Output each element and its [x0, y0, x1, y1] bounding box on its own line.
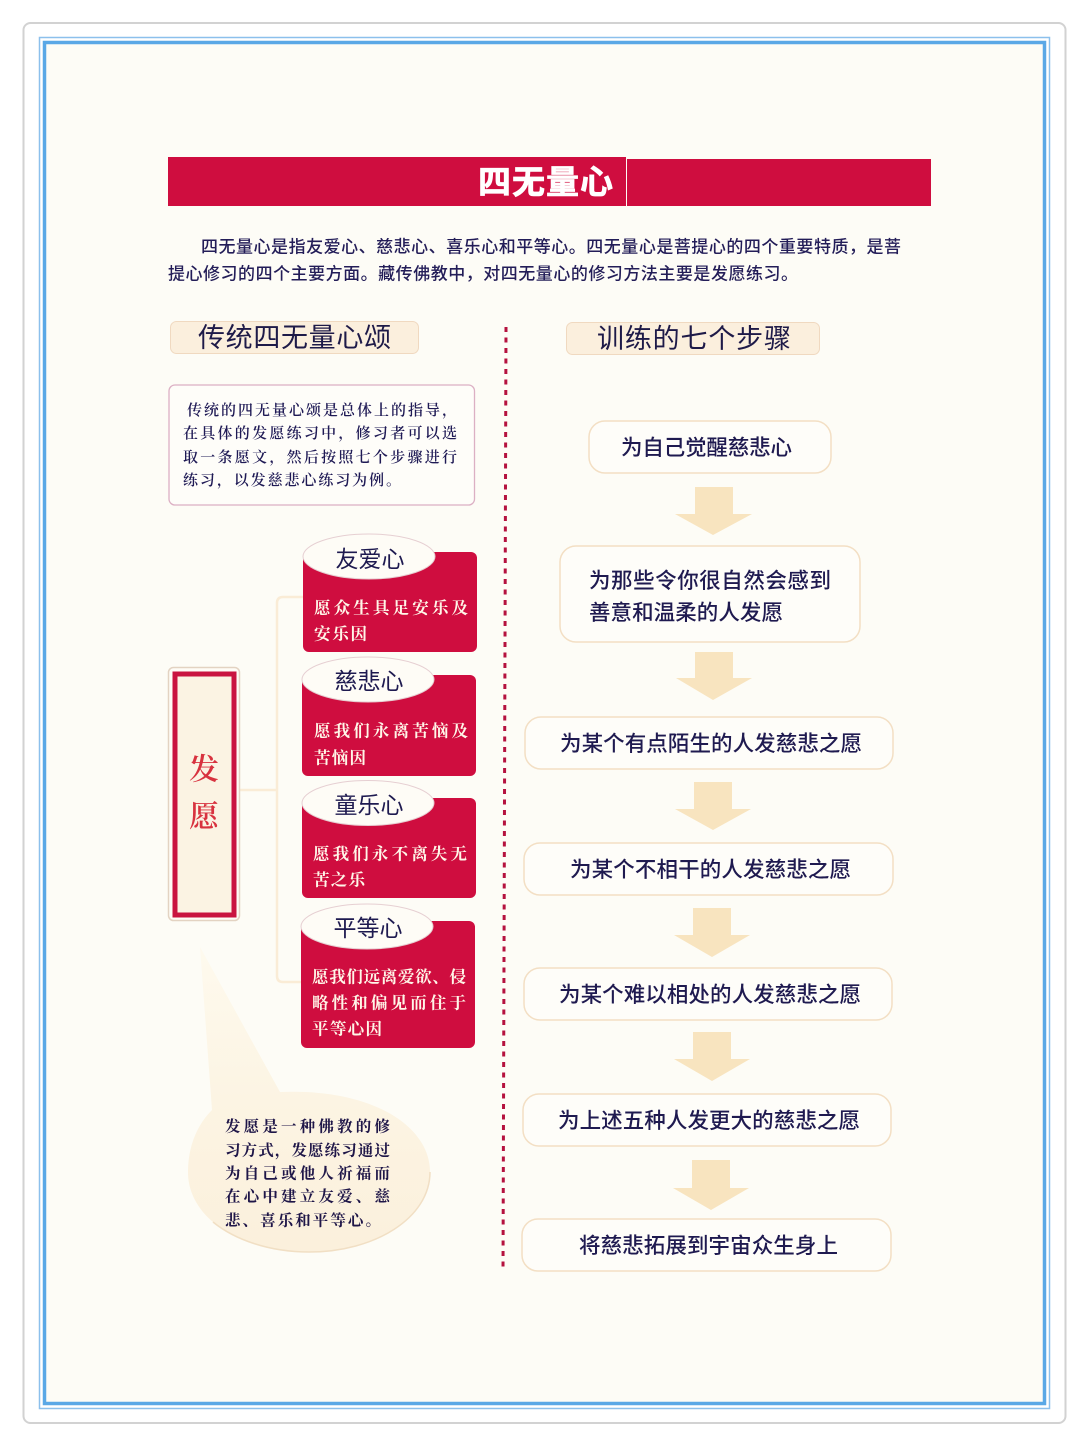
title banner [168, 157, 931, 206]
card: loving kindness: 愿众生具足安乐及 [314, 598, 468, 618]
card: loving kindness: 安乐因 [314, 624, 367, 644]
arrow 2 [676, 652, 752, 700]
intro paragraph [168, 238, 901, 284]
step 4: 为某个不相干的人发慈悲之愿 [570, 858, 851, 882]
card: equanimity [301, 904, 475, 1048]
step 1: 为自己觉醒慈悲心 [621, 436, 792, 460]
step 4 [524, 843, 893, 895]
card: equanimity: 略性和偏见而住于 [312, 992, 466, 1012]
note box: 在具体的发愿练习中，修习者可以选 [183, 424, 457, 442]
card: joy: 愿我们永不离失无 [313, 844, 467, 864]
speech bubble: 悲、喜乐和平等心。 [225, 1210, 381, 1230]
card: joy: 童乐心 [334, 792, 404, 818]
intro paragraph: 提心修习的四个主要方面。藏传佛教中，对四无量心的修习方法主要是发愿练习。 [168, 264, 798, 284]
arrow 1 [675, 487, 752, 535]
note box: 传统的四无量心颂是总体上的指导， [187, 401, 457, 419]
arrow 5 [674, 1032, 750, 1081]
card: loving kindness: 友爱心 [336, 546, 404, 572]
connector lines [240, 597, 303, 982]
speech bubble [188, 947, 430, 1252]
card: compassion [302, 657, 476, 776]
card: equanimity: 平等心 [334, 915, 402, 941]
step 7 [522, 1219, 891, 1271]
arrow 4 [674, 908, 750, 957]
card: joy: 苦之乐 [313, 870, 366, 890]
step 3 [525, 717, 893, 769]
card: equanimity: 平等心因 [312, 1018, 382, 1038]
center dotted divider [503, 327, 506, 1272]
heading: traditional verse: 传统四无量心颂 [198, 323, 391, 353]
step 6: 为上述五种人发更大的慈悲之愿 [558, 1109, 860, 1133]
card: compassion: 苦恼因 [314, 748, 366, 768]
intro paragraph: 四无量心是指友爱心、慈悲心、喜乐心和平等心。四无量心是菩提心的四个重要特质，是菩 [201, 238, 901, 256]
title: 四无量心 [478, 164, 613, 200]
speech bubble: 为自己或他人祈福而 [225, 1164, 390, 1182]
card: compassion: 愿我们永离苦恼及 [314, 720, 468, 740]
speech bubble: 习方式，发愿练习通过 [225, 1140, 390, 1160]
card: compassion: 慈悲心 [334, 668, 404, 694]
arrow 3 [675, 782, 751, 830]
note box: 取一条愿文，然后按照七个步骤进行 [183, 448, 457, 466]
heading: seven steps: 训练的七个步骤 [597, 324, 791, 354]
card: equanimity: 愿我们远离爱欲、侵 [312, 966, 466, 986]
step 5 [524, 968, 892, 1020]
speech bubble: 发愿是一种佛教的修 [225, 1116, 390, 1136]
arrow 6 [673, 1160, 749, 1210]
step 7: 将慈悲拓展到宇宙众生身上 [579, 1234, 838, 1258]
card: joy [302, 780, 476, 898]
vow box: 愿 [189, 800, 220, 834]
card: loving kindness [303, 534, 477, 652]
note box: 练习，以发慈悲心练习为例。 [183, 471, 401, 489]
vow box [168, 668, 240, 920]
step 6 [523, 1094, 891, 1146]
step 2 [560, 546, 860, 642]
step 3: 为某个有点陌生的人发慈悲之愿 [560, 732, 862, 756]
step 2: 善意和温柔的人发愿 [589, 601, 783, 625]
step 1 [589, 421, 831, 473]
step 5: 为某个难以相处的人发慈悲之愿 [559, 983, 861, 1007]
note box [169, 385, 474, 505]
vow box: 发 [189, 754, 219, 786]
speech bubble: 在心中建立友爱、慈 [225, 1186, 391, 1206]
step 2: 为那些令你很自然会感到 [589, 568, 831, 593]
